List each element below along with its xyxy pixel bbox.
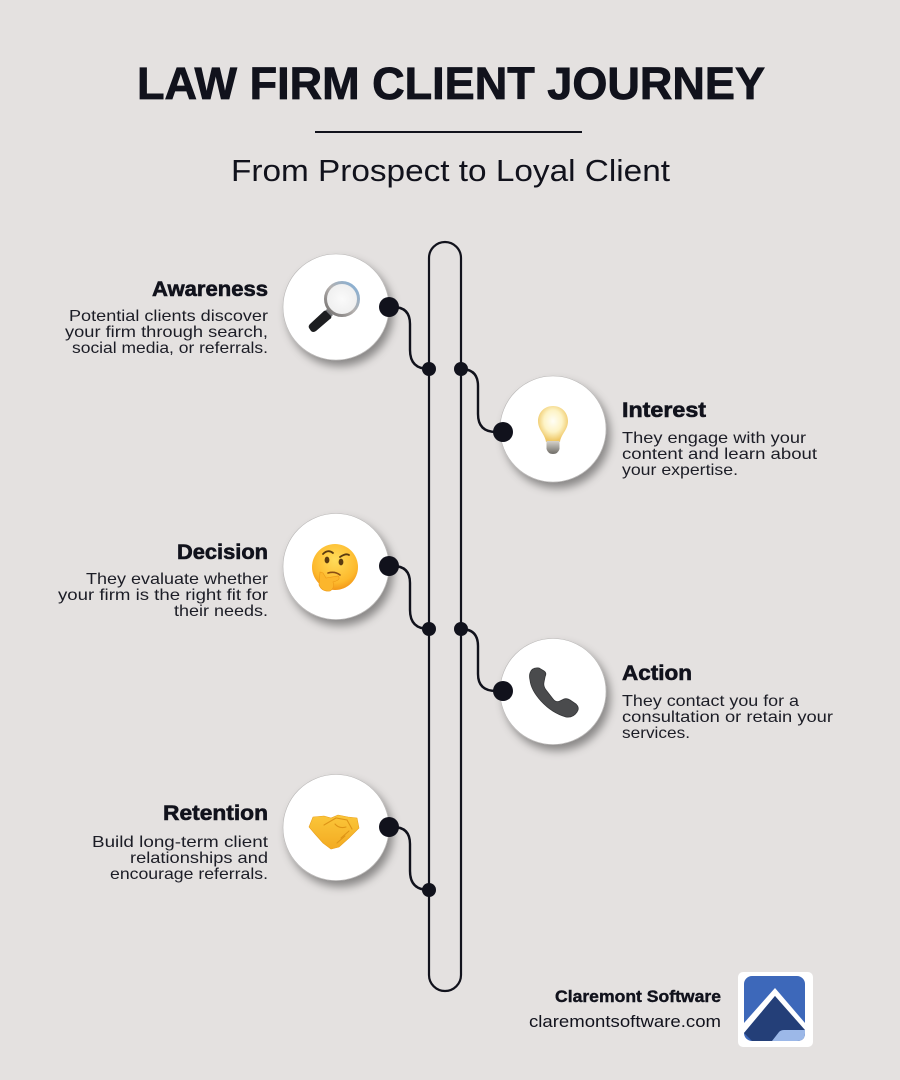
connector dot	[379, 556, 399, 576]
title: LAW FIRM CLIENT JOURNEY	[137, 58, 765, 109]
interest text: Interest	[622, 399, 706, 422]
icon: light bulb	[538, 406, 568, 454]
decision circle	[283, 514, 389, 620]
step: action	[493, 638, 834, 744]
interest text	[622, 399, 818, 479]
connector dot	[493, 422, 513, 442]
icon: thinking face	[312, 544, 358, 591]
retention text	[92, 802, 269, 883]
awareness text	[65, 278, 269, 357]
retention text: Retention	[163, 802, 268, 825]
decision text: their needs.	[174, 603, 268, 620]
connector dot	[493, 681, 513, 701]
awareness text: social media, or referrals.	[72, 340, 268, 357]
action text: services.	[622, 725, 690, 742]
awareness text: Potential clients discover	[69, 308, 269, 325]
step: retention	[92, 774, 399, 883]
step: interest	[493, 376, 818, 482]
awareness circle	[283, 254, 389, 360]
icon: magnifying glass	[309, 282, 358, 332]
footer brand: Claremont Software	[555, 988, 721, 1006]
action text: They contact you for a	[622, 693, 799, 710]
retention text: relationships and	[130, 850, 268, 867]
icon: handshake	[309, 815, 359, 849]
logo	[738, 972, 813, 1047]
decision text: Decision	[177, 541, 268, 564]
action text	[622, 662, 834, 742]
connectors	[389, 307, 503, 890]
connector dot	[379, 817, 399, 837]
track junction dots	[422, 362, 468, 897]
retention circle	[283, 774, 389, 880]
subtitle: From Prospect to Loyal Client	[231, 153, 670, 188]
awareness text: your firm through search,	[65, 324, 268, 341]
decision text	[58, 541, 269, 620]
step: decision	[58, 514, 399, 620]
interest circle	[500, 376, 606, 482]
interest text: They engage with your	[622, 430, 807, 447]
footer brand	[529, 988, 721, 1031]
interest text: your expertise.	[622, 462, 738, 479]
awareness text: Awareness	[152, 278, 268, 301]
connector dot	[379, 297, 399, 317]
action circle	[500, 638, 606, 744]
interest text: content and learn about	[622, 446, 818, 463]
retention text: Build long-term client	[92, 834, 269, 851]
timeline track	[429, 242, 461, 991]
decision text: They evaluate whether	[86, 571, 269, 588]
footer brand: claremontsoftware.com	[529, 1013, 721, 1031]
step: awareness	[65, 254, 399, 360]
action text: Action	[622, 662, 692, 685]
icon: telephone receiver	[530, 668, 578, 717]
decision text: your firm is the right fit for	[58, 587, 269, 604]
action text: consultation or retain your	[622, 709, 834, 726]
retention text: encourage referrals.	[110, 866, 268, 883]
